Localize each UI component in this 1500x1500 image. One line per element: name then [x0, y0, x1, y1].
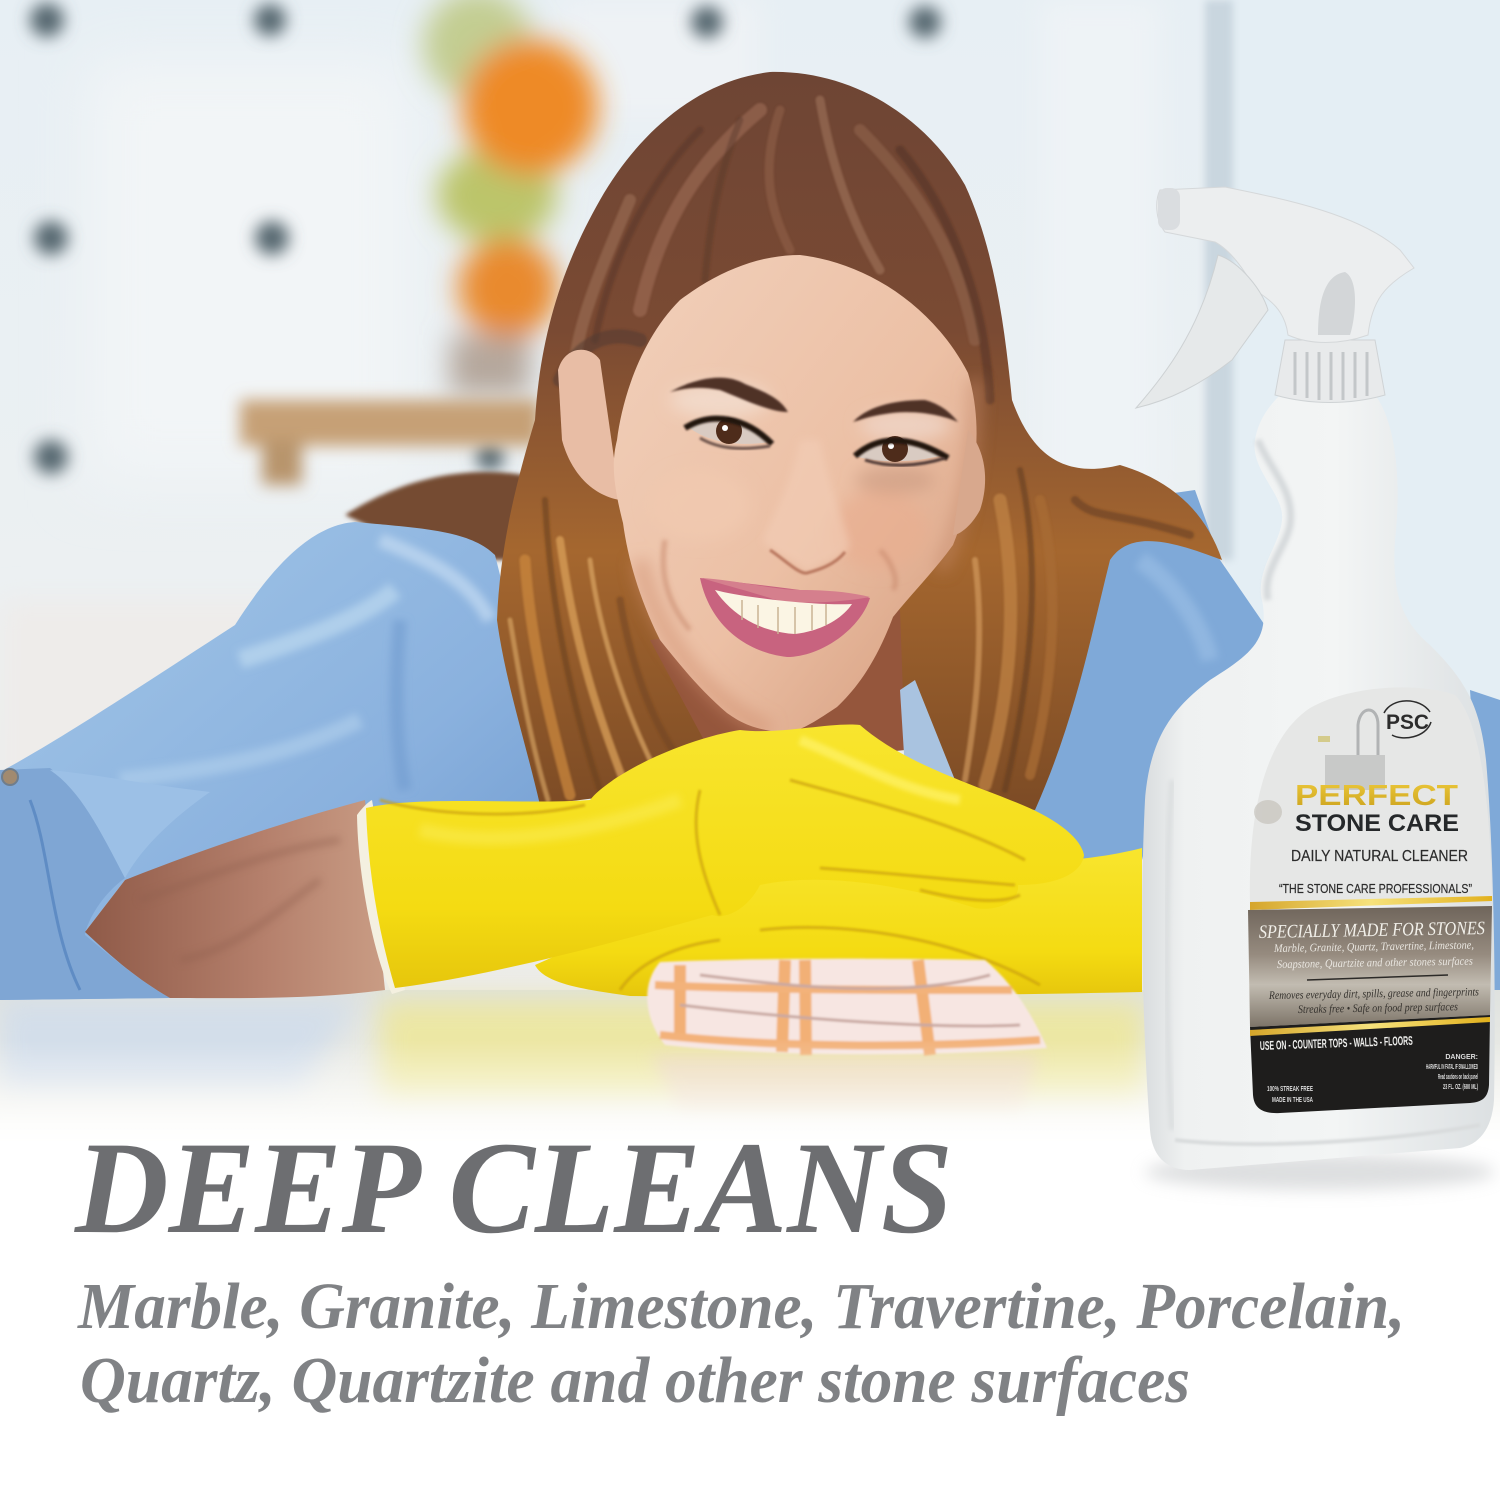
tagline: “THE STONE CARE PROFESSIONALS” — [1279, 882, 1472, 896]
cap collar — [1275, 340, 1385, 402]
hair strands — [510, 100, 1190, 800]
towel — [647, 959, 1047, 1055]
right-side ear hint — [953, 430, 985, 535]
subheading: Marble, Granite, Limestone, Travertine, Porcelain, — [77, 1270, 1405, 1343]
nose — [763, 440, 850, 573]
subheading — [77, 1270, 1405, 1417]
label: MADE IN THE USA — [1272, 1097, 1313, 1104]
white fade at the base of the photo — [0, 1040, 1500, 1150]
shirt beyond bottle — [1470, 690, 1500, 990]
band text: Streaks free • Safe on food prep surfaces — [1298, 1001, 1458, 1016]
gold stripe — [1250, 896, 1492, 910]
shirt: left sleeve — [0, 522, 560, 1000]
smile lines — [663, 540, 895, 630]
label — [1248, 687, 1492, 1113]
bottle shadow — [1145, 1154, 1495, 1190]
label: STONE CARE — [1295, 810, 1459, 837]
trigger — [1136, 255, 1268, 408]
wooden shelf — [240, 400, 540, 485]
spray bottle — [1136, 187, 1495, 1190]
blurred kitchen background — [0, 0, 1500, 1010]
face — [614, 255, 977, 733]
band text: Marble, Granite, Quartz, Travertine, Limestone, — [1273, 940, 1474, 955]
forearm — [85, 800, 385, 998]
brown band — [1248, 906, 1492, 1027]
subheading: Quartz, Quartzite and other stone surfaces — [80, 1344, 1190, 1417]
black panel — [1250, 1015, 1490, 1113]
small print left: 100% STREAK FREE — [1267, 1086, 1313, 1093]
product name: PERFECT — [1295, 780, 1458, 812]
small print right: DANGER: — [1445, 1054, 1478, 1061]
woman — [0, 72, 1500, 1000]
bottle body — [1142, 395, 1495, 1170]
product type: DAILY NATURAL CLEANER — [1291, 848, 1468, 865]
pegboard holes — [30, 3, 941, 474]
glove shading — [380, 780, 1040, 990]
sink image — [1254, 710, 1385, 824]
mouth — [700, 578, 870, 657]
band text — [1259, 918, 1485, 1016]
collar patch — [900, 680, 1000, 830]
glove cuff — [357, 800, 405, 994]
face shading — [640, 380, 975, 730]
hair mass — [497, 72, 1222, 810]
upper glove — [366, 725, 1084, 988]
table surface — [0, 990, 1500, 1180]
band text: Soapstone, Quartzite and other stones surfaces — [1277, 956, 1473, 971]
forearm veins — [140, 840, 340, 960]
label background — [1250, 687, 1492, 905]
eyes — [685, 418, 948, 465]
hanging fruit — [423, 0, 598, 395]
sprayer head — [1157, 187, 1414, 342]
PSC logo — [1384, 701, 1431, 738]
shirt: sleeve folds — [120, 540, 490, 790]
small print right — [1426, 1054, 1478, 1091]
ear — [558, 350, 620, 500]
neck shadow — [650, 610, 905, 770]
back hair — [345, 472, 530, 560]
shirt: right shoulder — [1000, 490, 1275, 870]
lower glove — [535, 848, 1142, 997]
PSC logo: PSC — [1386, 711, 1429, 734]
heading: DEEP CLEANS — [74, 1114, 953, 1261]
shirt: cuff detail — [0, 768, 210, 1000]
bottle grip shading — [1258, 440, 1291, 600]
brows — [670, 378, 958, 422]
